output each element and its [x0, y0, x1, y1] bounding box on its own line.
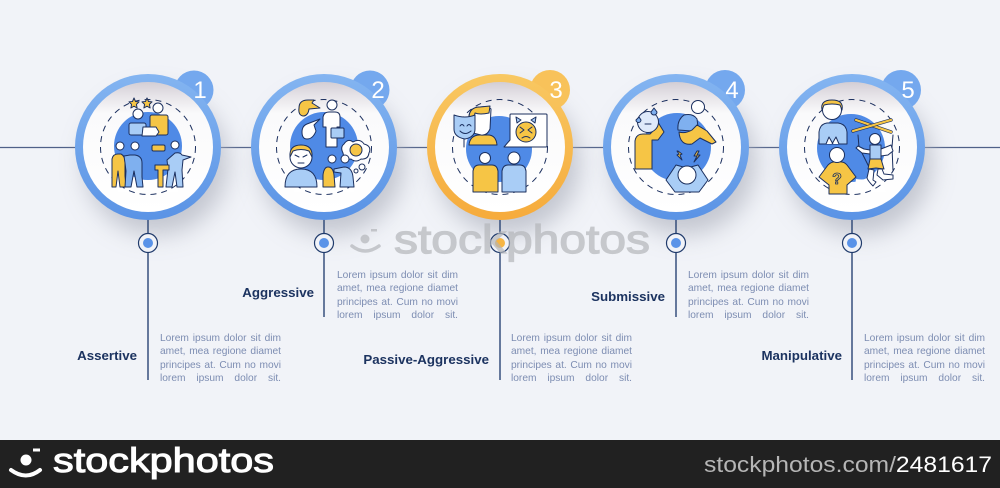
text block: Assertive — [160, 333, 281, 384]
text block: Aggressive: principes at. Cum no movi — [337, 297, 458, 308]
footer bar — [0, 440, 1000, 488]
text block: Manipulative: lorem ipsum dolor sit. — [864, 373, 985, 384]
timeline line — [0, 146, 1000, 148]
text block: Aggressive: Lorem ipsum dolor sit dim — [337, 270, 458, 281]
text block: Submissive: lorem ipsum dolor sit. — [688, 310, 809, 321]
text block: Aggressive — [337, 270, 458, 321]
node marker 5 — [842, 234, 862, 252]
icon: puppet master and puppet: ? — [832, 171, 842, 188]
heading: Passive-Aggressive: Passive-Aggressive — [363, 352, 489, 367]
icon: mask, masked man and devil speech bubble — [454, 106, 547, 192]
node marker 4 — [666, 234, 686, 252]
step 3: Passive-Aggressive circle — [427, 70, 580, 380]
text block: Passive-Aggressive: Lorem ipsum dolor sit dim — [511, 333, 632, 344]
heading: Submissive: Submissive — [591, 289, 665, 304]
icon: puppet master and puppet — [819, 100, 893, 194]
number 4: 4 — [725, 77, 739, 104]
footer logo — [11, 442, 274, 480]
text block: Submissive: principes at. Cum no movi — [688, 297, 809, 308]
text block: Submissive: Lorem ipsum dolor sit dim — [688, 270, 809, 281]
number 1: 1 — [193, 77, 207, 104]
node marker 3 — [490, 234, 510, 252]
text block: Assertive: Lorem ipsum dolor sit dim — [160, 333, 281, 344]
heading: Aggressive: Aggressive — [242, 285, 314, 300]
number 5: 5 — [901, 77, 915, 104]
text block: Assertive: amet, mea regione diamet — [160, 346, 281, 357]
text block: Passive-Aggressive: lorem ipsum dolor sit. — [511, 373, 632, 384]
text block: Aggressive: lorem ipsum dolor sit. — [337, 310, 458, 321]
icon: aggressive pointing hands and angry man — [285, 100, 370, 187]
number badge 5 — [881, 70, 921, 110]
step 5: Manipulative circle — [779, 70, 932, 380]
step 2: Aggressive circle — [251, 70, 404, 317]
text block: Submissive: amet, mea regione diamet — [688, 283, 809, 294]
icon: assertive people with stars — [112, 98, 191, 187]
text block: Manipulative: amet, mea regione diamet — [864, 346, 985, 357]
text block: Passive-Aggressive: principes at. Cum no movi — [511, 360, 632, 371]
number badge 4 — [705, 70, 745, 110]
text block: Aggressive: amet, mea regione diamet — [337, 283, 458, 294]
text block: Assertive: lorem ipsum dolor sit. — [160, 373, 281, 384]
footer image id: stockphotos.com/ 2481617 — [704, 452, 992, 477]
node marker 1 — [138, 234, 158, 252]
text block: Submissive — [688, 270, 809, 321]
node marker 2 — [314, 234, 334, 252]
heading: Assertive: Assertive — [77, 348, 137, 363]
text block: Passive-Aggressive — [511, 333, 632, 384]
text block: Manipulative: Lorem ipsum dolor sit dim — [864, 333, 985, 344]
number badge 3 — [530, 70, 570, 110]
number 2: 2 — [371, 77, 385, 104]
number badge 2 — [350, 70, 390, 110]
number 3: 3 — [549, 77, 563, 104]
text block: Manipulative — [864, 333, 985, 384]
icon: submissive people — [635, 100, 716, 192]
watermark: stockphotos — [394, 218, 650, 262]
text block: Passive-Aggressive: amet, mea regione diamet — [511, 346, 632, 357]
text block: Manipulative: principes at. Cum no movi — [864, 360, 985, 371]
step 4: Submissive circle — [603, 70, 756, 317]
footer logo: stockphotos — [53, 442, 274, 480]
step 1: Assertive circle — [75, 70, 228, 380]
number badge 1 — [174, 70, 214, 110]
text block: Assertive: principes at. Cum no movi — [160, 360, 281, 371]
heading: Manipulative: Manipulative — [761, 348, 842, 363]
